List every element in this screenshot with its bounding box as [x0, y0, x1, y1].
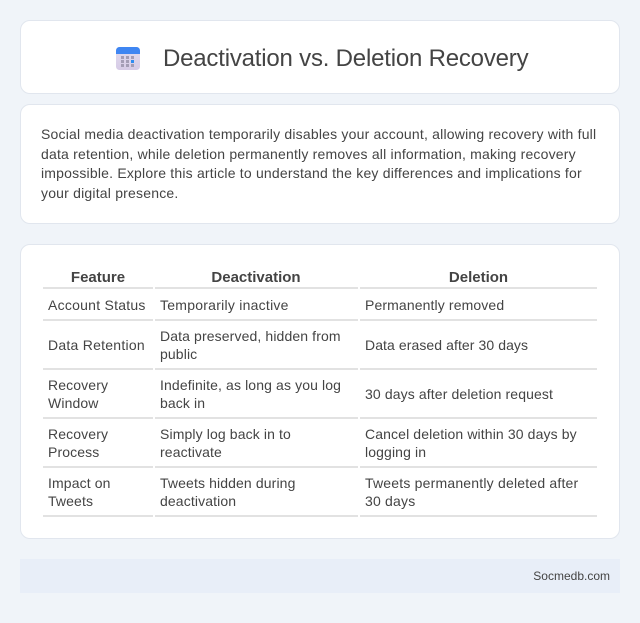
row: impact on tweets: Tweets hidden during [160, 475, 296, 491]
text: introduction paragraph [41, 126, 596, 201]
row: recovery window: Recovery [48, 377, 108, 393]
row: impact on tweets: deactivation [160, 493, 236, 509]
row: account status: Account Status [48, 297, 146, 313]
row: recovery window [48, 377, 553, 411]
row: recovery process [48, 426, 577, 460]
row: recovery process: Recovery [48, 426, 108, 442]
row: data retention [48, 328, 528, 362]
table header: Deletion [449, 269, 508, 286]
title: Deactivation vs. Deletion Recovery [163, 45, 528, 72]
row: recovery process: Cancel deletion within 30 days by [365, 426, 577, 442]
row: impact on tweets: Tweets [48, 493, 93, 509]
table header: Deactivation [211, 269, 301, 286]
row: account status [48, 297, 504, 313]
text: introduction paragraph: Social media deactivation temporarily disables your account, allowing recovery with full [41, 126, 596, 142]
text: introduction paragraph: your digital presence. [41, 184, 178, 200]
row: impact on tweets [48, 475, 578, 509]
row: recovery window: Window [48, 395, 99, 411]
text: introduction paragraph: impossible. Explore this article to understand the key differences and implications for [41, 165, 582, 181]
row: recovery process: Process [48, 444, 99, 460]
row: data retention: Data Retention [48, 337, 145, 353]
row: data retention: Data erased after 30 days [365, 337, 528, 353]
row: data retention: Data preserved, hidden from [160, 328, 341, 344]
row: account status: Temporarily inactive [160, 297, 289, 313]
panel: title card [20, 20, 620, 94]
footer text: Socmedb.com [533, 569, 610, 583]
table header: Feature [71, 269, 125, 286]
text: introduction paragraph: data retention, while deletion permanently removes all information, making recovery [41, 146, 576, 162]
row: recovery window: back in [160, 395, 205, 411]
row: recovery window: 30 days after deletion request [365, 386, 553, 402]
table header [71, 269, 508, 286]
panel: comparison table [20, 244, 620, 539]
row: account status: Permanently removed [365, 297, 504, 313]
row: impact on tweets: Impact on [48, 475, 111, 491]
footer bar [20, 559, 620, 593]
row: recovery process: reactivate [160, 444, 222, 460]
row: impact on tweets: 30 days [365, 493, 415, 509]
row: data retention: public [160, 346, 197, 362]
panel: introduction [20, 104, 620, 224]
row: recovery window: Indefinite, as long as you log [160, 377, 341, 393]
row: recovery process: Simply log back in to [160, 426, 291, 442]
row: impact on tweets: Tweets permanently deleted after [365, 475, 578, 491]
icon: calendar [116, 47, 140, 70]
row: recovery process: logging in [365, 444, 426, 460]
